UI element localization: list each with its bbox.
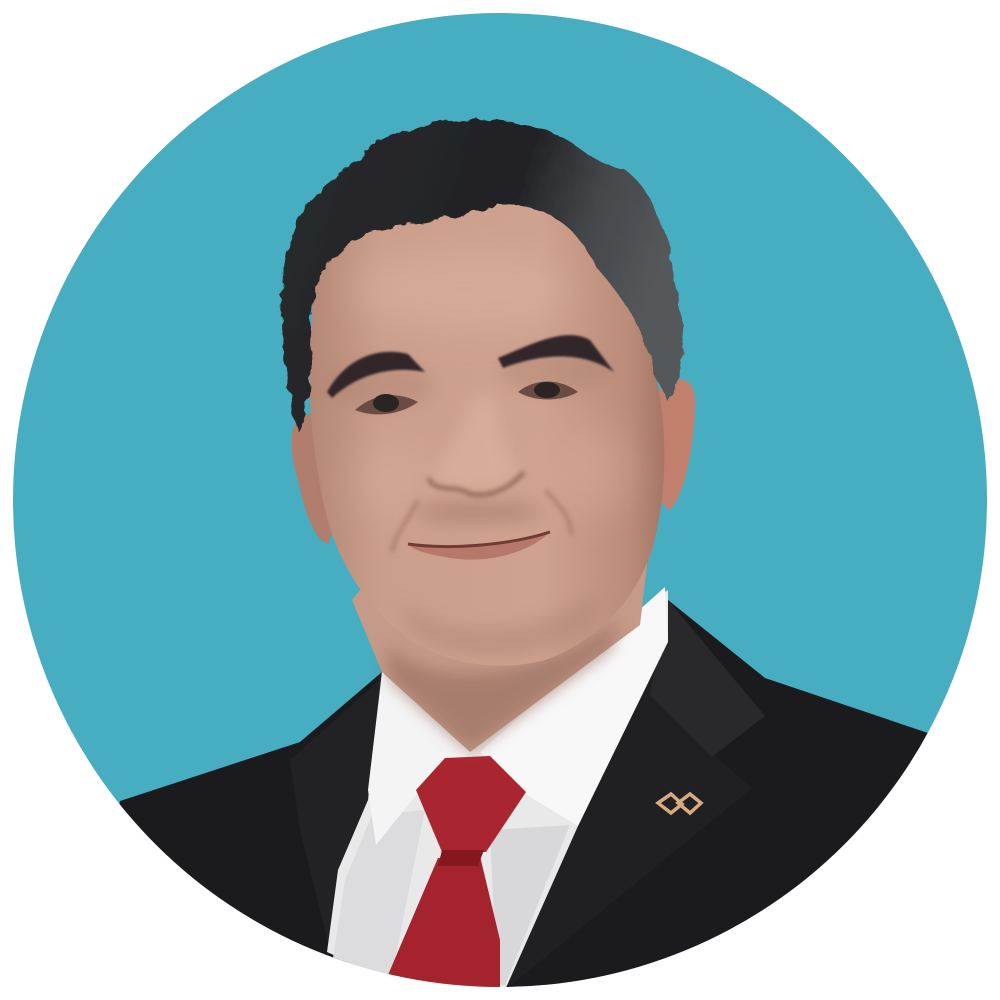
eyes <box>355 382 578 414</box>
nose <box>428 395 524 495</box>
lapel pin <box>658 794 701 813</box>
tie <box>385 756 526 1000</box>
suit jacket <box>120 600 928 987</box>
collar <box>368 672 470 845</box>
mouth <box>408 532 550 560</box>
neck <box>352 562 648 752</box>
lower lapel <box>506 986 509 987</box>
hair <box>282 120 683 432</box>
ears <box>292 379 695 544</box>
shirt <box>327 587 668 990</box>
eyebrows <box>327 335 614 398</box>
face shading <box>346 265 623 656</box>
face <box>309 187 664 666</box>
upper lapel <box>650 600 765 757</box>
